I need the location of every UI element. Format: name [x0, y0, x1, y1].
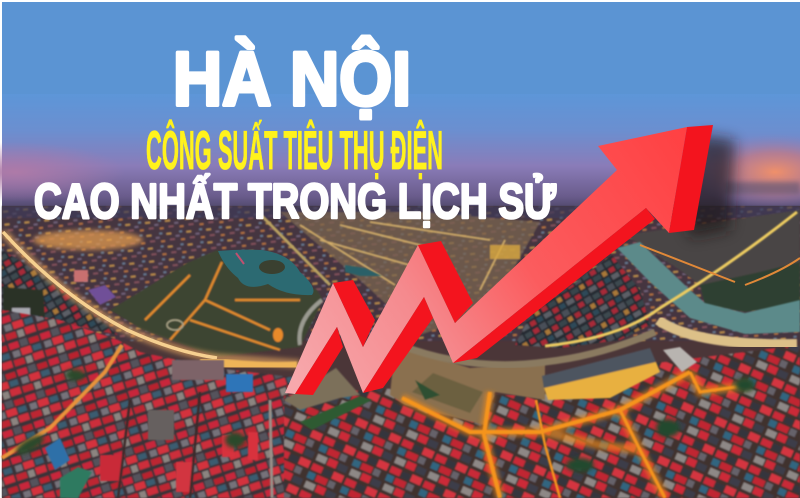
lower left road	[2, 345, 122, 458]
river	[617, 242, 800, 334]
left roofs neighbourhood	[2, 310, 300, 498]
city base	[2, 206, 800, 498]
headline: Cao nhất trong lịch sử: CAO NHẤT TRONG LỊCH SỬ	[34, 174, 556, 229]
central blocks	[45, 360, 272, 498]
right tree clusters	[566, 378, 755, 472]
curved highway behind arrow	[400, 332, 655, 365]
middle left district	[2, 250, 118, 335]
arrow dark faces	[295, 125, 713, 395]
main glowing road	[3, 232, 300, 366]
orange street network	[402, 372, 750, 498]
lake	[218, 250, 314, 295]
arrow drop shadow	[680, 135, 735, 238]
middle block plot	[390, 345, 545, 425]
left tree clusters	[13, 369, 245, 458]
pond and fields right of lake	[258, 212, 382, 285]
far district with lights	[2, 206, 800, 341]
right land	[625, 210, 800, 312]
title: Hà Nội: HÀ NỘI	[173, 37, 411, 122]
park	[110, 250, 323, 357]
aerial city photo	[2, 206, 800, 498]
inner round neighbourhood	[515, 255, 650, 348]
flat blue header band	[2, 2, 800, 95]
river bridge road	[545, 212, 800, 346]
block row building and glow	[542, 347, 697, 400]
sky gradient	[0, 94, 800, 214]
right roofs neighbourhood	[284, 345, 800, 498]
building and trees under arrow	[284, 368, 372, 430]
red rising arrow	[285, 125, 713, 395]
arrow front face	[285, 127, 687, 394]
